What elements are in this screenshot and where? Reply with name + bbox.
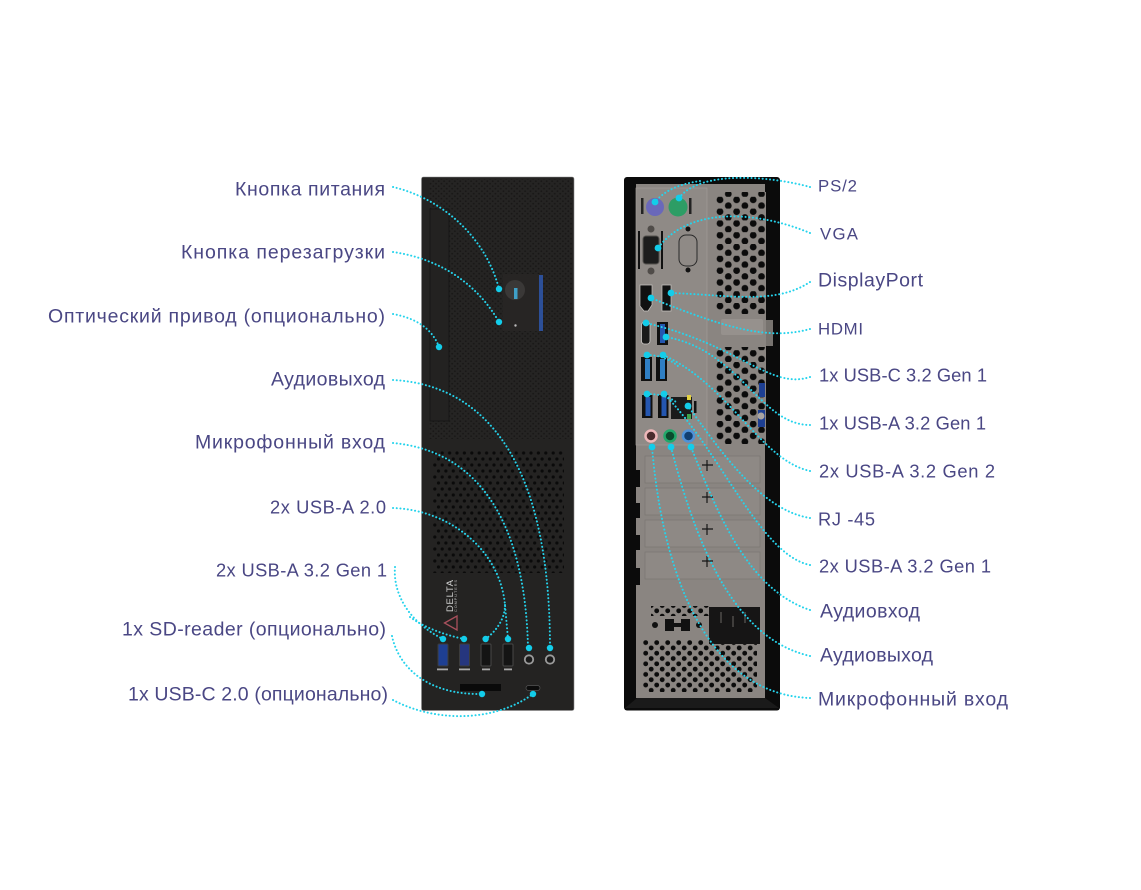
bottom bevel: [625, 698, 779, 708]
labels: rear ports: [818, 176, 1009, 710]
labels: front ports: 2x USB-A 3.2 Gen 1: [216, 560, 387, 580]
front USB-C port: [526, 686, 540, 690]
labels: rear ports: 2x USB-A 3.2 Gen 2: [819, 460, 995, 482]
front USB ports: [437, 644, 513, 670]
labels: rear ports: 1x USB-C 3.2 Gen 1: [819, 364, 987, 386]
labels: rear ports: PS/2: [818, 176, 857, 196]
labels: rear ports: 1x USB-A 3.2 Gen 1: [819, 412, 986, 434]
rear USB-C port: [642, 322, 650, 344]
front audio jacks: [525, 655, 554, 664]
blank oval cutout: [679, 226, 697, 272]
connector dots: [436, 195, 694, 697]
logo: Delta Computers: DELTA: [445, 579, 456, 612]
panel: rear of PC case: [624, 177, 780, 710]
labels: front ports: Оптический привод (опционально): [48, 306, 385, 328]
labels: rear ports: 2x USB-A 3.2 Gen 1: [819, 556, 991, 576]
labels: front ports: Кнопка питания: [235, 178, 385, 200]
optical drive bay: [430, 209, 449, 421]
rear audio jacks: [646, 430, 694, 442]
I/O shield: [636, 188, 707, 445]
leader lines: front: [392, 187, 550, 716]
labels: rear ports: DisplayPort: [818, 270, 924, 292]
chassis strap: [712, 314, 773, 347]
power and reset button block: [503, 274, 543, 331]
top perforation: [429, 179, 572, 439]
case body front: [422, 177, 574, 710]
logo: Delta Computers: [444, 579, 458, 630]
labels: front ports: Микрофонный вход: [195, 432, 386, 454]
labels: rear ports: Аудиовыход: [820, 644, 934, 666]
panel: front of PC case: [422, 177, 574, 710]
labels: rear ports: RJ -45: [818, 508, 875, 530]
labels: rear ports: Аудиовход: [820, 600, 921, 622]
rear USB-A port group: [641, 322, 668, 418]
DisplayPort port: [662, 285, 671, 311]
blue thumbscrew clips: [758, 383, 765, 427]
VGA port: [638, 226, 663, 274]
power supply: [643, 606, 760, 692]
expansion slots: [645, 456, 760, 579]
HDMI port: [640, 285, 652, 311]
labels: front ports: [48, 178, 388, 706]
lower mesh vent: [433, 450, 564, 573]
leader lines: rear: [646, 178, 810, 698]
labels: rear ports: Микрофонный вход: [818, 688, 1009, 710]
metal plate: [636, 184, 765, 698]
labels: front ports: Аудиовыход: [271, 368, 386, 390]
logo: Delta Computers: COMPUTERS: [454, 580, 458, 612]
labels: front ports: Кнопка перезагрузки: [181, 242, 385, 264]
PS/2 ports: [641, 198, 692, 216]
labels: front ports: 1x SD-reader (опционально): [122, 618, 386, 640]
labels: rear ports: VGA: [820, 224, 859, 244]
SD card slot: [460, 684, 501, 691]
rear vent: [716, 192, 766, 444]
labels: rear ports: HDMI: [818, 320, 863, 338]
case body rear: [624, 177, 780, 710]
labels: front ports: 1x USB-C 2.0 (опционально): [128, 684, 388, 706]
RJ-45 port: [671, 395, 696, 419]
labels: front ports: 2x USB-A 2.0: [270, 496, 386, 518]
